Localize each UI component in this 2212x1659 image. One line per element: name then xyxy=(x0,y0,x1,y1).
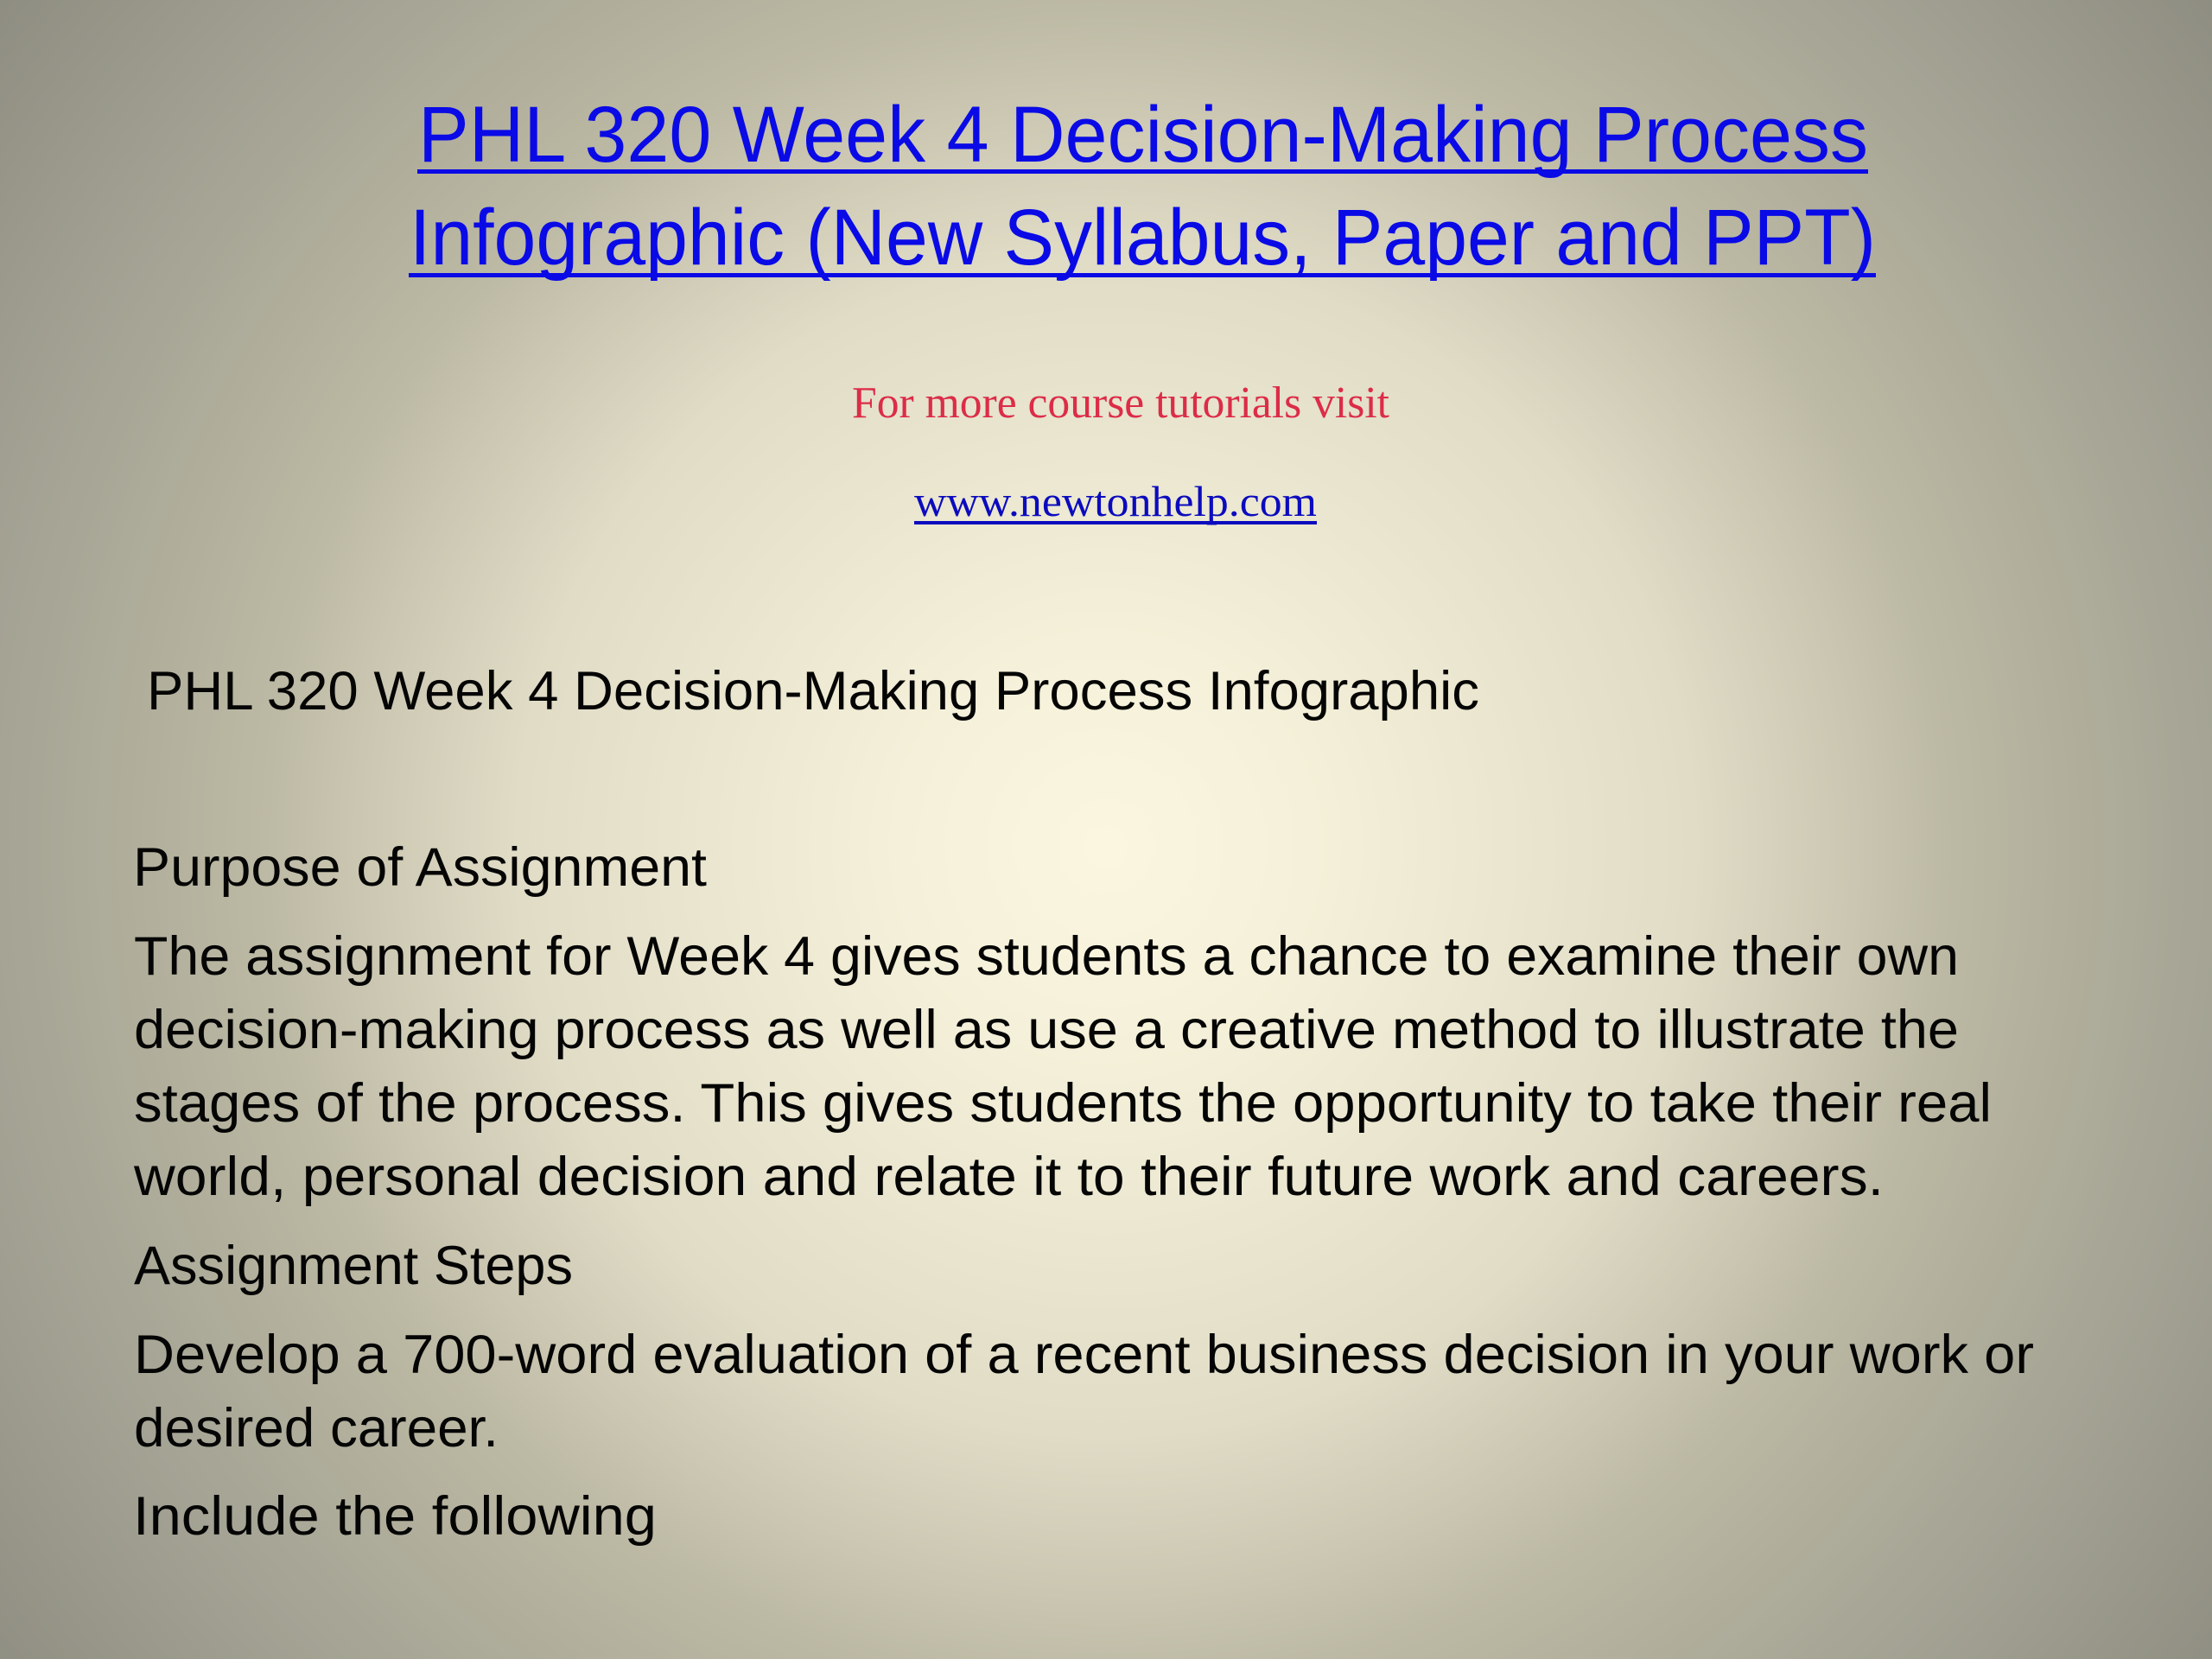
call to action text: For more course tutorials visit xyxy=(852,378,1390,428)
paragraph: purpose: stages of the process. This gives students the opportunity to take their real xyxy=(134,1073,1992,1134)
paragraph: purpose: world, personal decision and relate it to their future work and careers. xyxy=(133,1147,1884,1207)
paragraph: purpose xyxy=(133,926,1992,1207)
title: PHL 320 Week 4 Decision-Making Process xyxy=(418,91,1868,179)
paragraph: purpose: decision-making process as well as use a creative method to illustrate the xyxy=(134,1000,1959,1060)
body text block xyxy=(133,837,2034,1547)
paragraph: steps: desired career. xyxy=(134,1398,499,1459)
subheading: PHL 320 Week 4 Decision-Making Process Infographic xyxy=(147,661,1479,721)
paragraph: purpose: The assignment for Week 4 gives students a chance to examine their own xyxy=(134,926,1959,987)
title xyxy=(409,91,1876,282)
heading: assignment steps: Assignment Steps xyxy=(134,1236,573,1296)
paragraph: steps xyxy=(134,1325,2034,1459)
paragraph: steps: Develop a 700-word evaluation of a recent business decision in your work or xyxy=(134,1325,2034,1385)
heading: purpose of assignment: Purpose of Assignment xyxy=(133,837,708,898)
website link: www.newtonhelp.com xyxy=(914,477,1317,525)
title: Infographic (New Syllabus, Paper and PPT) xyxy=(410,194,1876,282)
closing line: Include the following xyxy=(133,1486,657,1547)
